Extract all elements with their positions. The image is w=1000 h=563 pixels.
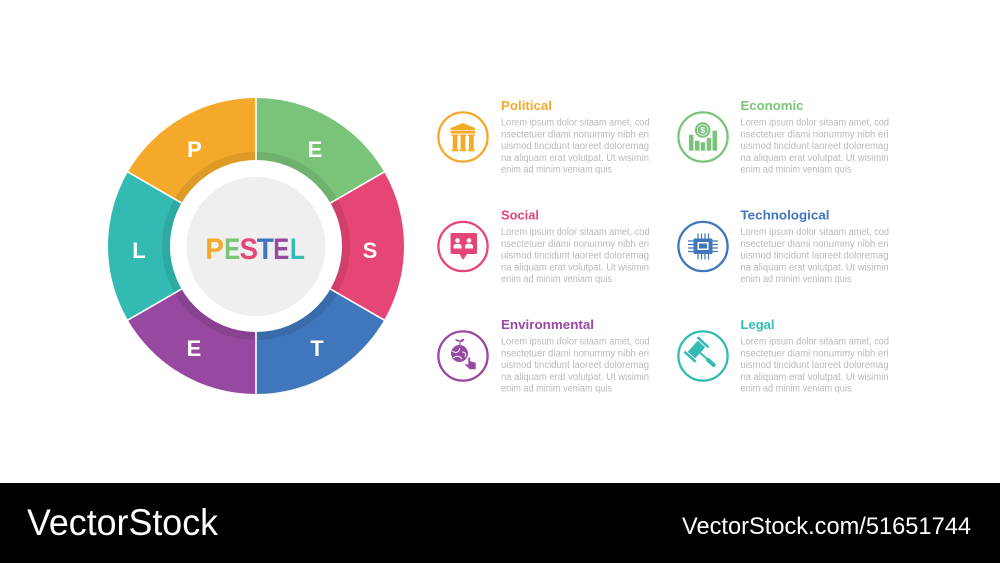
item: Technological: [678, 208, 889, 285]
body text: enim ad minim veniam quis: [740, 274, 852, 285]
body text: na aliquam erat volutpat. Ut wisimin: [740, 153, 888, 164]
body text: uismod tincidunt laoreet doloremag: [740, 360, 888, 371]
body text: [740, 118, 889, 176]
icon: coin and bar chart: [678, 112, 728, 162]
letter L: L: [132, 238, 146, 263]
body text: na aliquam erat volutpat. Ut wisimin: [501, 153, 649, 164]
segment: L legal: [108, 172, 256, 320]
body text: enim ad minim veniam quis: [501, 384, 612, 394]
body text: na aliquam erat volutpat. Ut wisimin: [740, 262, 888, 273]
segment: P political: [128, 98, 256, 246]
segment: E environmental: [128, 246, 256, 394]
centre title: T: [257, 233, 274, 266]
centre title: L: [290, 233, 305, 266]
body text: [740, 227, 889, 285]
item: Political: [438, 99, 650, 176]
body text: enim ad minim veniam quis: [501, 274, 612, 285]
body text: Lorem ipsum dolor sitaam amet, cod: [740, 227, 889, 238]
body text: nsectetuer diami nonummy nibh eri: [501, 348, 649, 359]
centre circle: [186, 177, 326, 316]
centre title: P: [205, 233, 224, 266]
body text: Lorem ipsum dolor sitaam amet, cod: [501, 227, 650, 238]
icon: coin and bar chart: $: [700, 125, 705, 135]
letter E: E: [308, 137, 322, 162]
body text: uismod tincidunt laoreet doloremag: [740, 250, 888, 262]
body text: uismod tincidunt laoreet doloremag: [740, 141, 888, 152]
letter P: P: [187, 137, 202, 162]
body text: enim ad minim veniam quis: [501, 164, 612, 176]
body text: Lorem ipsum dolor sitaam amet, cod: [740, 336, 889, 348]
body text: enim ad minim veniam quis: [740, 164, 852, 176]
letter E: E: [187, 336, 201, 361]
heading: Environmental: [501, 318, 594, 332]
body text: na aliquam erat volutpat. Ut wisimin: [501, 372, 649, 383]
footer bar: [0, 483, 1000, 563]
body text: nsectetuer diami nonummy nibh eri: [740, 129, 888, 140]
body text: [740, 336, 889, 394]
centre title: [205, 233, 305, 266]
segment: T technological: [256, 246, 384, 394]
heading: Economic: [740, 99, 804, 113]
heading: Technological: [740, 208, 830, 222]
body text: nsectetuer diami nonummy nibh eri: [740, 348, 888, 359]
body text: uismod tincidunt laoreet doloremag: [501, 250, 649, 262]
icon: microchip: [678, 222, 728, 271]
body text: Lorem ipsum dolor sitaam amet, cod: [740, 118, 889, 128]
PESTEL wheel diagram: [108, 97, 404, 395]
centre title: E: [224, 233, 240, 266]
segment: E economic: [256, 98, 384, 246]
segment: S social: [256, 172, 404, 320]
icon: speech bubble with people: [438, 222, 488, 271]
body text: na aliquam erat volutpat. Ut wisimin: [740, 372, 888, 383]
heading: Social: [501, 208, 539, 222]
body text: Lorem ipsum dolor sitaam amet, cod: [501, 118, 650, 128]
letter T: T: [310, 336, 324, 361]
footer image id: VectorStock.com/51651744: [682, 513, 971, 540]
centre title: E: [273, 233, 289, 266]
letter S: S: [363, 238, 377, 263]
footer logo: VectorStock: [27, 502, 218, 543]
icon: globe, sprout and pointing hand: [438, 331, 488, 381]
item: Social: [438, 208, 650, 285]
item: Environmental: [438, 318, 650, 394]
body text: na aliquam erat volutpat. Ut wisimin: [501, 262, 649, 273]
body text: nsectetuer diami nonummy nibh eri: [740, 239, 888, 250]
icon: gavel: [678, 331, 728, 381]
icon: government building: [438, 112, 488, 162]
body text: nsectetuer diami nonummy nibh eri: [501, 239, 649, 250]
body text: uismod tincidunt laoreet doloremag: [501, 141, 649, 152]
heading: Political: [501, 99, 552, 113]
centre title: S: [240, 233, 258, 266]
body text: uismod tincidunt laoreet doloremag: [501, 360, 649, 371]
body text: [501, 118, 650, 176]
body text: [501, 227, 650, 285]
body text: enim ad minim veniam quis: [740, 384, 852, 394]
item: Economic: [678, 99, 889, 176]
item: Legal: [678, 318, 889, 394]
heading: Legal: [740, 318, 774, 332]
body text: Lorem ipsum dolor sitaam amet, cod: [501, 336, 650, 348]
body text: [501, 336, 650, 394]
body text: nsectetuer diami nonummy nibh eri: [501, 129, 649, 140]
